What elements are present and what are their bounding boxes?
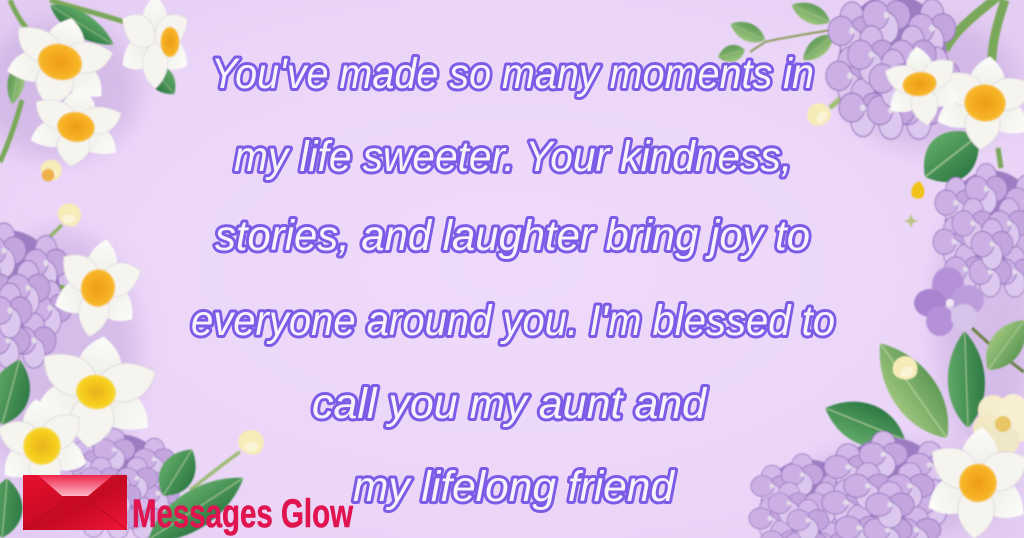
icon: red envelope [23, 475, 127, 530]
top-right cluster [716, 0, 1024, 228]
bottom-right cluster [749, 423, 1024, 538]
line 5: call you my aunt and [312, 380, 708, 428]
logo text: Messages Glow [132, 492, 354, 536]
cream flower [973, 394, 1024, 455]
line 3: stories, and laughter bring joy to [215, 212, 810, 260]
daffodil: lower [20, 81, 132, 173]
right-middle cluster [818, 164, 1024, 459]
logo: Messages Glow [23, 475, 354, 536]
left cluster [0, 199, 179, 538]
bud: orange tip [36, 156, 65, 186]
message text [191, 50, 835, 511]
daffodil: top [0, 3, 128, 121]
line 2: my life sweeter. Your kindness, [234, 133, 792, 181]
bottom-left cluster [0, 426, 267, 538]
top-left cluster [0, 0, 194, 186]
line 4: everyone around you. I'm blessed to [191, 297, 835, 345]
line 1: You've made so many moments in [211, 50, 814, 98]
line 6: my lifelong friend [353, 463, 676, 511]
daffodil: top right partial [116, 0, 194, 89]
